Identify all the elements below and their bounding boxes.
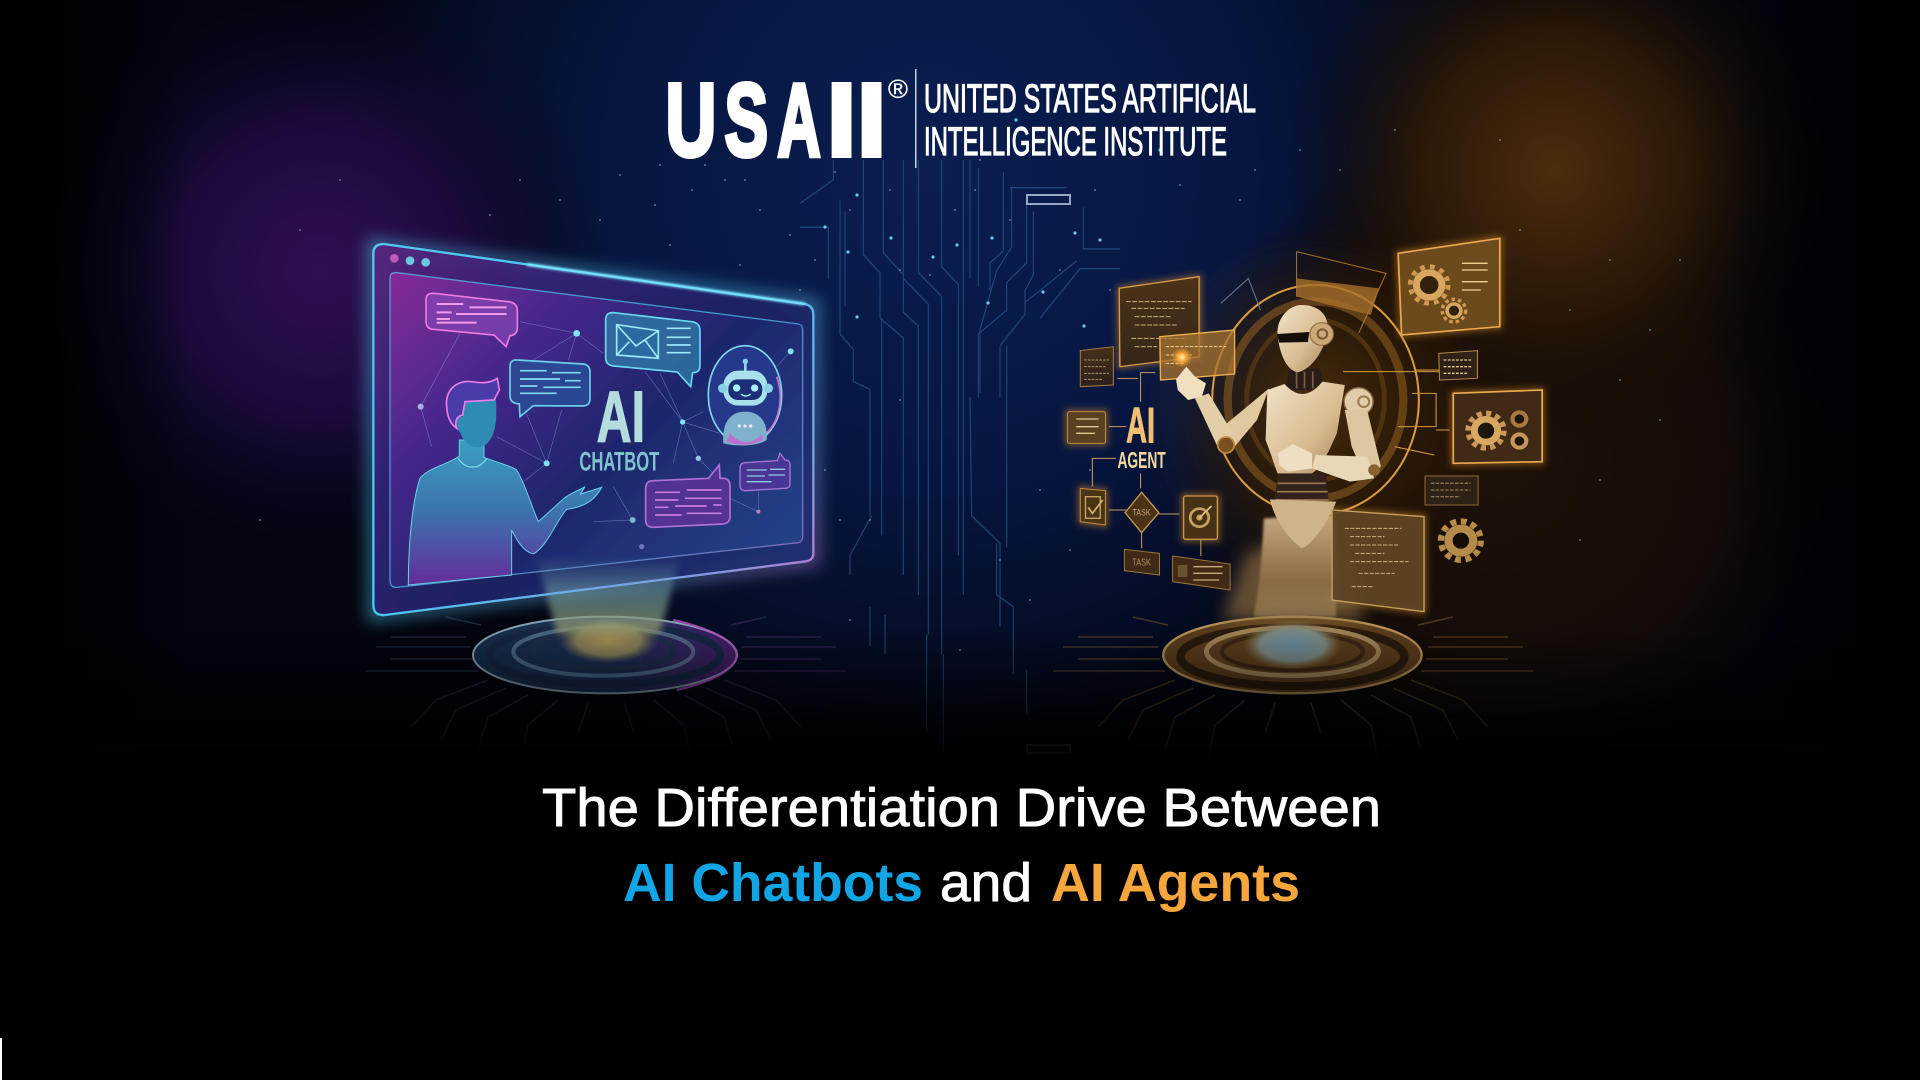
network lines — [421, 322, 790, 522]
near shoulder — [1344, 388, 1373, 416]
diamond: task — [1125, 492, 1159, 533]
circuit fan under chatbot base — [366, 617, 846, 755]
box: notes — [1068, 412, 1105, 443]
near arm — [1345, 410, 1381, 478]
robot neck — [1285, 368, 1326, 390]
head — [1277, 305, 1328, 372]
code panel top left — [1119, 277, 1199, 367]
robot smoke — [1223, 544, 1364, 620]
near fist — [1278, 444, 1312, 472]
panel: AI chatbot hologram — [373, 244, 813, 693]
robot avatar — [708, 346, 782, 446]
gold aura rings — [1212, 252, 1450, 515]
fingertip spark — [1172, 347, 1192, 367]
screen body — [373, 244, 813, 615]
circuit traces in centre — [800, 160, 1120, 753]
logo wordmark: USAII: I — [827, 62, 856, 178]
screen inner area — [390, 273, 803, 587]
title: AI Chatbots: AI Chatbots — [623, 853, 923, 913]
hologram base rings — [473, 617, 737, 693]
far arm upper — [1221, 388, 1269, 447]
box: task — [1124, 549, 1160, 575]
inner frame — [390, 273, 803, 587]
robot — [1172, 305, 1381, 620]
small panel left — [1080, 347, 1113, 387]
panel glow — [1068, 238, 1542, 612]
far hand — [1176, 367, 1206, 400]
person — [408, 378, 602, 585]
robot waist — [1274, 473, 1329, 507]
corner white mark — [0, 1038, 2, 1080]
logo line 1: UNITED STATES ARTIFICIAL — [924, 77, 1256, 121]
gear: free-floating — [1441, 521, 1481, 560]
far arm fore — [1195, 393, 1233, 450]
box: clipboard — [1080, 488, 1105, 525]
top right gear panel — [1398, 238, 1500, 335]
flow connectors — [1092, 373, 1201, 556]
logo wordmark: USAII: U — [666, 62, 716, 178]
robot torso — [1266, 382, 1345, 473]
screen body tint — [373, 244, 813, 615]
network nodes — [418, 330, 794, 549]
bubble: pink — [426, 293, 517, 347]
label: CHATBOT: CHATBOT — [579, 447, 659, 477]
logo wordmark: USAII: S — [725, 62, 768, 178]
circuit fan under agent base — [1053, 617, 1533, 755]
right gear panel — [1453, 390, 1542, 463]
title — [542, 778, 1381, 913]
screen frame — [373, 244, 813, 615]
bubble: mail — [606, 313, 700, 387]
code panel bottom — [1332, 510, 1424, 612]
box: report — [1173, 556, 1230, 590]
bubble: violet small — [740, 453, 790, 491]
light beam — [537, 557, 680, 633]
panel: AI agent hologram — [1068, 220, 1542, 693]
bubble: teal — [510, 360, 590, 417]
diamond: task: TASK — [1133, 508, 1151, 518]
label: AI: AI — [1126, 397, 1155, 453]
box: target — [1184, 496, 1217, 539]
window dots — [390, 254, 430, 267]
screen glow — [373, 245, 813, 615]
label: AI: AI — [597, 377, 645, 458]
bubble: purple — [646, 465, 730, 527]
title: and: and — [940, 853, 1032, 913]
top edge highlight — [527, 264, 805, 304]
robot hips — [1270, 499, 1336, 548]
logo line 2: INTELLIGENCE INSTITUTE — [924, 120, 1227, 164]
logo — [666, 62, 1256, 178]
glass panel — [1160, 330, 1235, 380]
visor — [1277, 332, 1309, 343]
robot legs — [1254, 515, 1336, 617]
small panel right — [1439, 351, 1477, 380]
title: AI Agents: AI Agents — [1051, 853, 1300, 913]
logo wordmark: USAII: A — [778, 62, 820, 178]
registered mark: ® — [888, 74, 908, 104]
small panel lower right — [1425, 476, 1478, 505]
logo wordmark: USAII: I — [857, 62, 886, 178]
logo divider — [915, 69, 916, 168]
box: task: TASK — [1132, 558, 1151, 569]
starfield — [260, 90, 1680, 650]
small dash marks — [1027, 195, 1070, 753]
title line 1: The Differentiation Drive Between — [542, 778, 1381, 838]
label: AGENT: AGENT — [1117, 448, 1166, 474]
base ring — [1163, 617, 1422, 693]
amber aura behind robot — [1133, 220, 1491, 593]
